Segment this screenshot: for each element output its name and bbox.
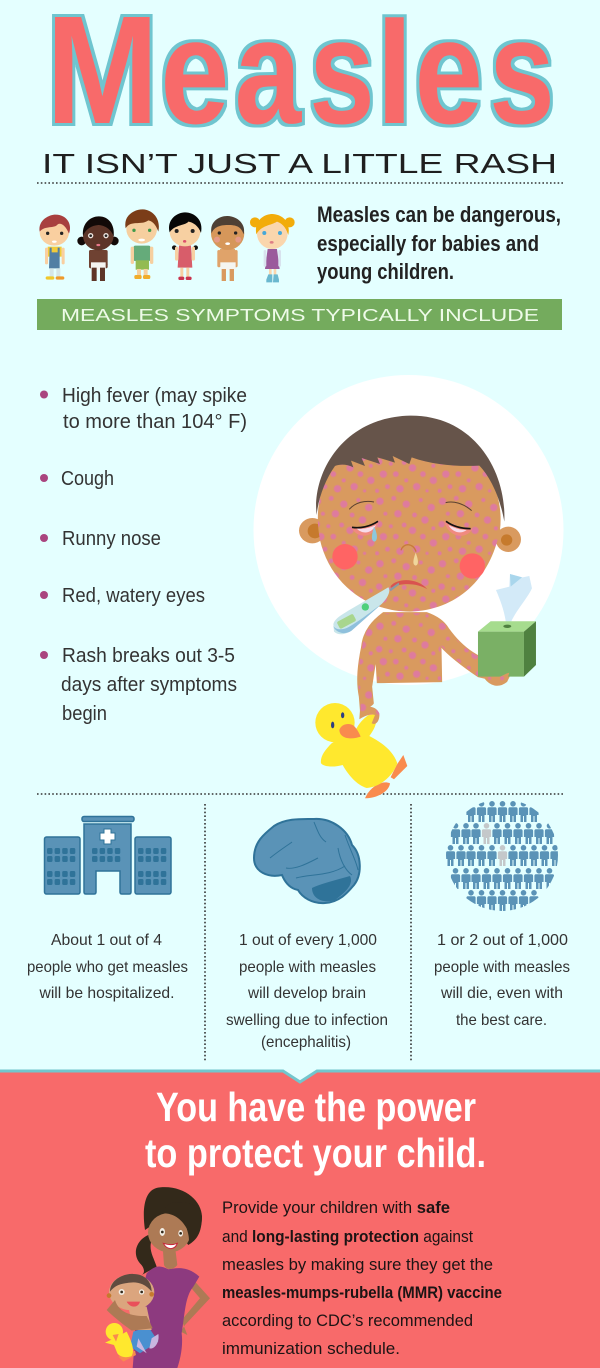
stat text: hospitalized: [27, 932, 188, 1002]
hair: [316, 416, 504, 522]
bullet: cough: [40, 468, 114, 490]
child 2: [77, 216, 119, 281]
child 3: [125, 209, 159, 279]
child 1: [39, 215, 70, 280]
icon: crowd of people in a circle: [446, 801, 560, 911]
bullet: red eyes: Red, watery eyes: [62, 585, 205, 607]
white circle behind sick boy: [254, 375, 564, 685]
body and arms: [358, 613, 510, 713]
stat text: encephalitis: will develop brain: [247, 985, 366, 1002]
child 5: [211, 216, 244, 281]
fingers on box: [485, 673, 509, 685]
stat text: deaths: will die, even with: [440, 985, 563, 1002]
stat text: deaths: [434, 932, 570, 1029]
stat text: encephalitis: [226, 932, 388, 1051]
subtitle: IT ISN’T JUST A LITTLE RASH: [42, 148, 557, 179]
stat text: encephalitis: 1 out of every 1,000: [239, 932, 377, 949]
bullet: rash: begin: [62, 703, 107, 725]
heading: You have the power: [156, 1084, 476, 1130]
stat text: encephalitis: people with measles: [239, 959, 376, 976]
panel: protect your child: [0, 1071, 600, 1368]
icon: hospital: [44, 816, 171, 894]
duck toy: [315, 703, 407, 798]
bullet: rash: Rash breaks out 3-5: [62, 645, 235, 667]
ears: [299, 518, 521, 552]
mother's dress: [133, 1266, 199, 1368]
bullet: high fever: High fever (may spike: [62, 385, 247, 407]
stat text: hospitalized: About 1 out of 4: [51, 932, 162, 949]
stat text: hospitalized: will be hospitalized.: [39, 985, 175, 1002]
body copy: according to CDC’s recommended: [222, 1311, 473, 1330]
illustration: row of six children: [39, 209, 295, 282]
illustration: sick boy: [299, 416, 536, 798]
bullet: rash: [40, 645, 237, 725]
left eye: [349, 501, 379, 542]
stat text: deaths: the best care.: [456, 1012, 547, 1029]
stat text: encephalitis: swelling due to infection: [226, 1012, 388, 1029]
child 4: [169, 212, 201, 280]
symptom list: [40, 385, 247, 725]
body copy: [222, 1198, 502, 1358]
nose and drip: [401, 545, 418, 566]
mother's neck and face: [148, 1202, 202, 1269]
body copy: and long-lasting protection against: [222, 1227, 473, 1246]
stat text: deaths: people with measles: [434, 959, 570, 976]
bullet: runny nose: Runny nose: [62, 528, 161, 550]
stat text: deaths: 1 or 2 out of 1,000: [437, 932, 568, 949]
thermometer: [333, 583, 399, 634]
head: [318, 454, 501, 612]
intro text: young children.: [317, 259, 454, 284]
bullet: cough: Cough: [61, 468, 114, 490]
illustration: mother, baby and duck: [105, 1187, 210, 1368]
tissue and box: [478, 574, 536, 677]
mother's hair: [136, 1187, 202, 1275]
icon: brain: [254, 819, 360, 903]
stat text: encephalitis: (encephalitis): [261, 1034, 351, 1051]
banner: symptoms heading: MEASLES SYMPTOMS TYPICALLY INCLUDE: [61, 305, 539, 325]
bullet: high fever: to more than 104° F): [63, 411, 247, 433]
heading: to protect your child.: [145, 1130, 486, 1176]
duck toy: [105, 1323, 136, 1362]
bullet: rash: days after symptoms: [61, 674, 237, 696]
mother's other arm: [107, 1300, 153, 1331]
intro text: [317, 202, 561, 284]
body copy: measles-mumps-rubella (MMR) vaccine: [222, 1283, 502, 1302]
right eye: [444, 502, 473, 536]
baby: [107, 1274, 159, 1353]
mouth: [391, 580, 427, 589]
bullet: high fever: [40, 385, 247, 433]
stat text: hospitalized: people who get measles: [27, 959, 188, 976]
body copy: Provide your children with safe: [222, 1198, 450, 1217]
body copy: measles by making sure they get the: [222, 1255, 493, 1274]
heading: [145, 1084, 486, 1176]
cheeks: [332, 544, 485, 579]
body copy: immunization schedule.: [222, 1339, 400, 1358]
intro text: Measles can be dangerous,: [317, 202, 561, 227]
banner: symptoms heading: [37, 299, 562, 330]
mother's arm: [181, 1282, 210, 1335]
title: [46, 0, 555, 156]
child 6: [250, 214, 295, 282]
intro text: especially for babies and: [317, 231, 539, 256]
